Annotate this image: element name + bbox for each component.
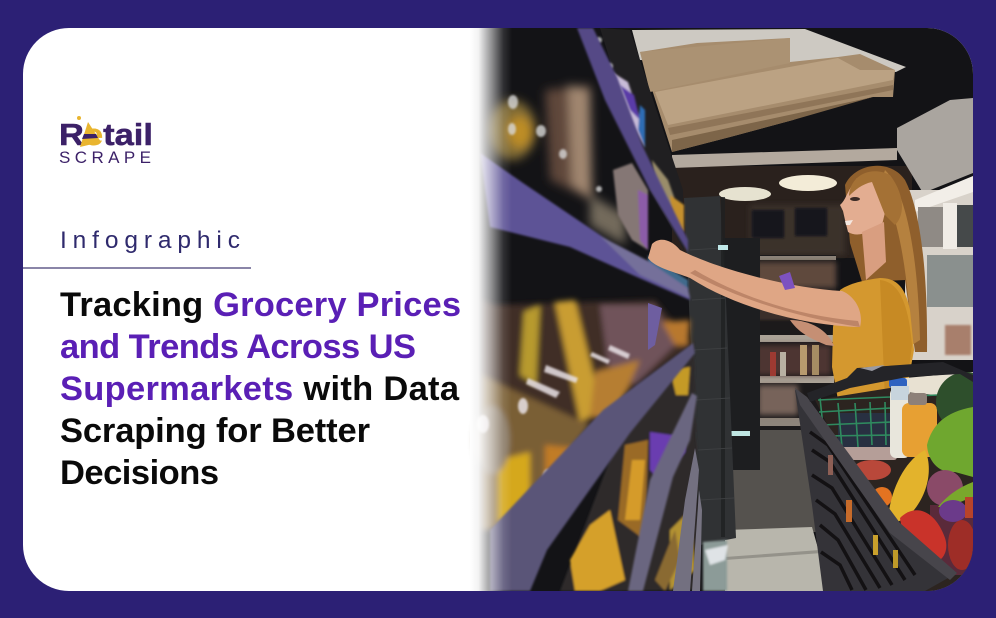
purple packs at top of lower shelf: [648, 303, 662, 350]
eye: [850, 197, 860, 201]
neck: [862, 222, 886, 280]
juice bottle: [902, 393, 937, 457]
milk bottle: [889, 378, 910, 458]
shopping cart: [795, 362, 973, 591]
handle highlight: [860, 365, 885, 371]
title: Decisions: [60, 454, 219, 492]
lettuce: [927, 407, 973, 477]
store back wall: [470, 28, 973, 591]
face: [840, 178, 888, 234]
top purple shelf strip: [577, 28, 688, 252]
items on floor: [703, 540, 728, 591]
ceiling beam: [672, 148, 897, 168]
basket mesh openings: [810, 432, 915, 590]
logo: [59, 116, 153, 167]
basket mesh colours: [828, 455, 898, 568]
top shelf goods: [612, 72, 684, 232]
watermelon: [936, 372, 996, 432]
dark bag behind basket: [838, 413, 892, 447]
store photo: [470, 28, 996, 591]
upper shelf bokeh: [508, 37, 613, 192]
right wall and column: [897, 98, 973, 360]
cart contents backdrop: [815, 378, 973, 591]
fourth shelf rail: [692, 490, 702, 591]
smile: [845, 220, 853, 225]
shelf price rail highlights: [477, 345, 630, 483]
back hair: [845, 166, 927, 352]
title: Scraping for Better: [60, 412, 370, 450]
logo word Scrape: SCRAPE: [59, 148, 151, 167]
ceiling panel and wood slats: [632, 29, 906, 152]
product in hand: [779, 272, 795, 290]
main lower purple shelf: [490, 343, 695, 591]
logo yellow triangle: [77, 116, 101, 147]
wine shelves: [752, 255, 836, 433]
label: Infographic: Infographic: [60, 227, 240, 254]
pendant lights: [719, 175, 837, 201]
title: Supermarkets with Data: [60, 370, 460, 408]
white fade over photo edge: [470, 28, 512, 591]
cart front rim: [795, 388, 957, 580]
title: Tracking Grocery Prices: [60, 286, 461, 324]
oranges: [872, 487, 892, 507]
dark store cabinets: [684, 196, 760, 545]
logo word Retail: Retail: [59, 117, 153, 152]
reaching arm and hand: [648, 240, 861, 346]
yellow shirt: [832, 278, 914, 400]
lower shelf interior goods: [560, 350, 700, 591]
second lower shelf rail: [628, 393, 697, 591]
second hand: [790, 320, 834, 346]
purple onion: [939, 500, 967, 522]
red apple: [948, 520, 976, 570]
green inner basket: [818, 395, 938, 447]
mid-upper goods near hand: [613, 163, 688, 290]
basket dark body: [795, 390, 957, 591]
red pepper: [900, 510, 946, 563]
woman: [832, 166, 927, 400]
fill tray: [840, 447, 897, 460]
small orange red fruit: [965, 497, 973, 518]
third lower shelf rail: [673, 448, 699, 591]
main upper purple shelf: [480, 153, 690, 300]
red and purple fill at right: [930, 505, 973, 575]
green pepper: [938, 482, 973, 507]
tomatoes: [853, 460, 891, 480]
title: [60, 286, 461, 492]
onion: [927, 470, 963, 506]
title: and Trends Across US: [60, 328, 416, 366]
right shelf post: [600, 28, 684, 250]
bananas: [888, 450, 929, 522]
shirt shadow: [880, 280, 912, 400]
floor: [725, 430, 823, 591]
back of cart cream panel: [905, 372, 973, 395]
upper left blurred packages: [488, 85, 625, 245]
front hair: [849, 171, 902, 225]
mid shelf goods: [474, 300, 692, 530]
cart handle: [807, 362, 973, 402]
hair highlights: [884, 170, 920, 344]
divider line: [23, 267, 251, 269]
